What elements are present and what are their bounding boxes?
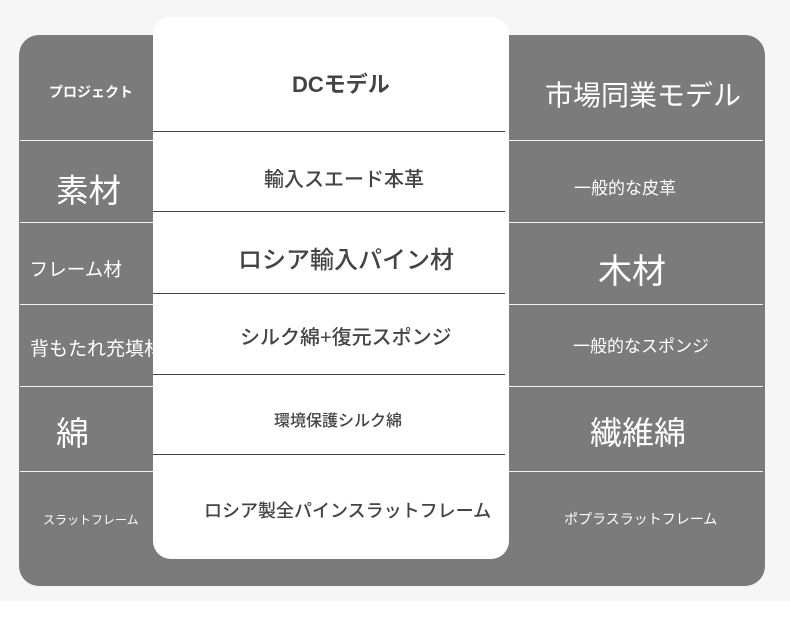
left label: slat frame: スラットフレーム bbox=[43, 513, 139, 527]
value: imported suede leather: 輸入スエード本革 bbox=[264, 169, 424, 191]
heading: DC model: DCモデル bbox=[292, 72, 390, 97]
value: Russian imported pine: ロシア輸入パイン材 bbox=[238, 247, 454, 274]
right value: ordinary sponge: 一般的なスポンジ bbox=[573, 337, 709, 356]
left label: cotton: 綿 bbox=[56, 415, 89, 452]
right value: wood: 木材 bbox=[598, 253, 666, 291]
right value: ordinary leather: 一般的な皮革 bbox=[574, 179, 676, 198]
left label: material: 素材 bbox=[56, 173, 121, 209]
left label: backrest filling: 背もたれ充填材 bbox=[30, 339, 163, 360]
panel: DC model white card bbox=[153, 17, 509, 559]
value: Russian pine slat frame: ロシア製全パインスラットフレーム bbox=[204, 501, 491, 521]
left heading: project: プロジェクト bbox=[49, 84, 133, 100]
left label: frame material: フレーム材 bbox=[30, 259, 122, 280]
right heading: market model: 市場同業モデル bbox=[545, 80, 741, 111]
value: eco silk cotton: 環境保護シルク綿 bbox=[274, 413, 402, 430]
value: silk cotton and sponge: シルク綿+復元スポンジ bbox=[240, 327, 452, 349]
right value: poplar slat frame: ポプラスラットフレーム bbox=[564, 511, 717, 527]
right value: fiber cotton: 繊維綿 bbox=[590, 415, 686, 451]
